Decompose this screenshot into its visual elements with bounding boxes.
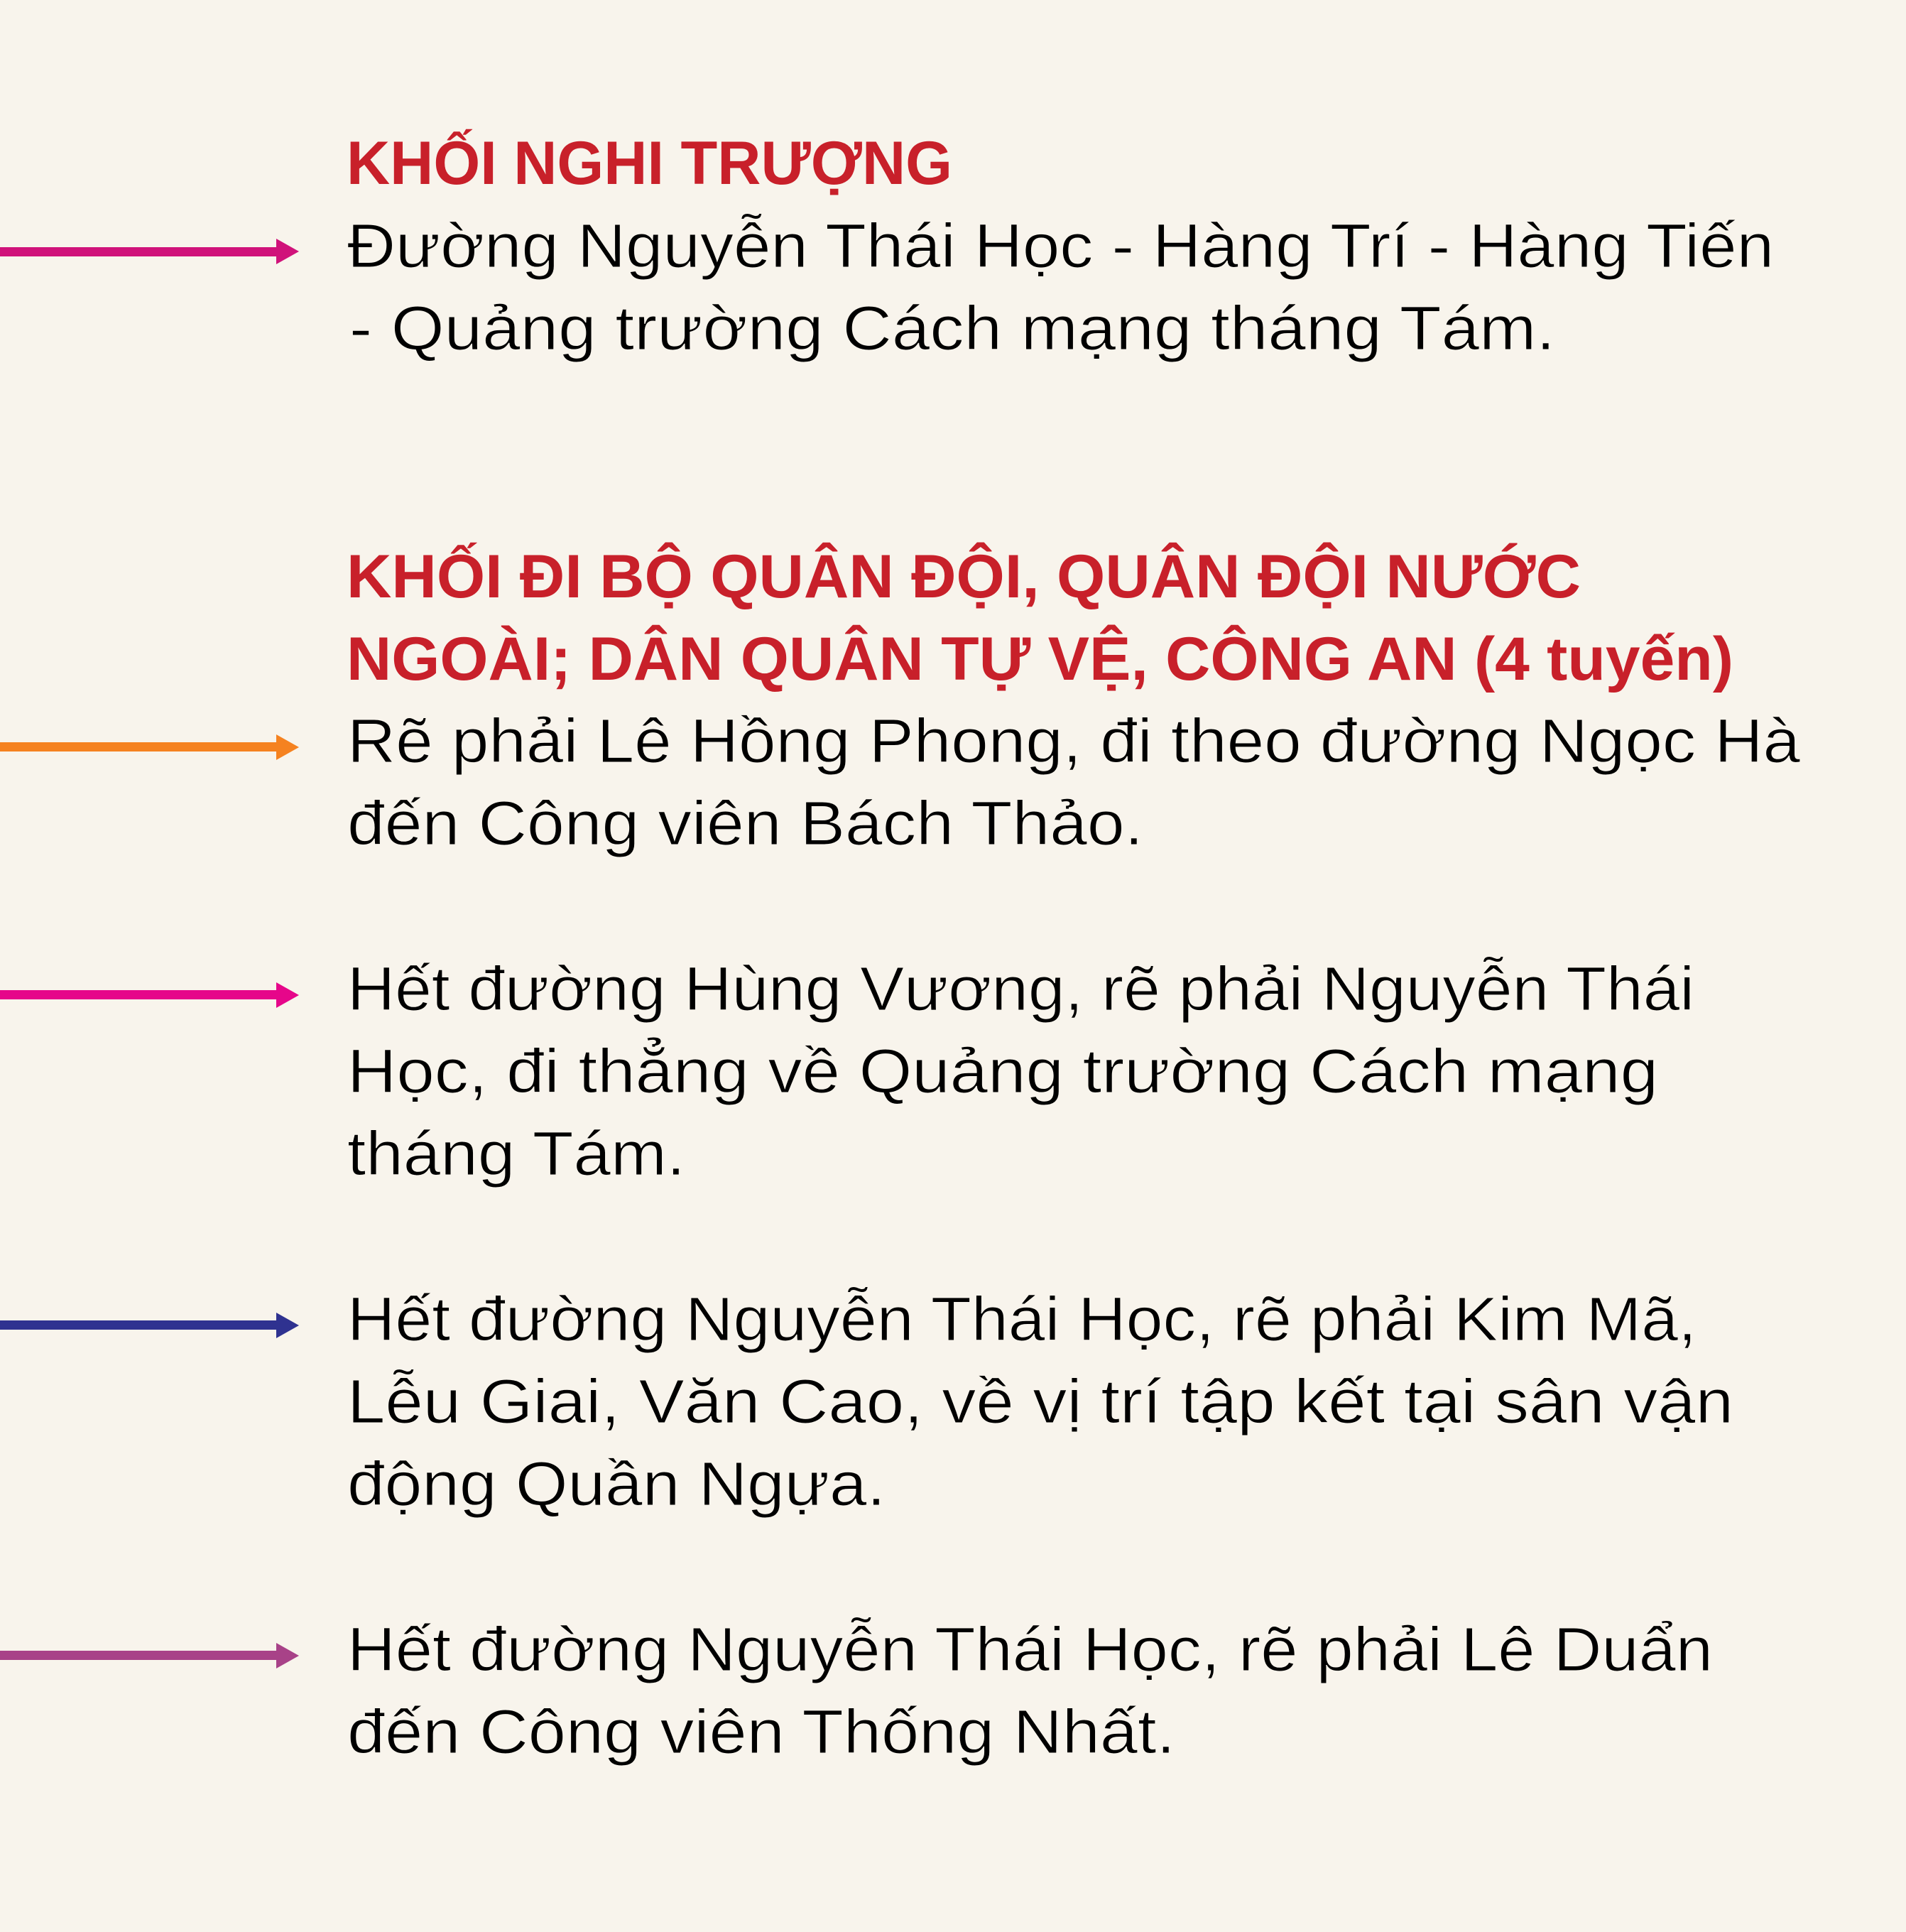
arrow: purple route: [0, 1643, 299, 1668]
route description: navy, line 3: động Quần Ngựa.: [347, 1450, 886, 1519]
route description: orange, line 1: Rẽ phải Lê Hồng Phong, đi theo đường Ngọc Hà: [347, 707, 1801, 776]
route description: magenta, line 3: tháng Tám.: [347, 1119, 685, 1188]
text block: magenta route: [347, 955, 1694, 1188]
arrow: navy route: [0, 1313, 299, 1338]
route description: navy, line 1: Hết đường Nguyễn Thái Học, rẽ phải Kim Mã,: [347, 1285, 1697, 1354]
route description: khoi nghi truong, line 1: Đường Nguyễn Thái Học - Hàng Trí - Hàng Tiến: [347, 212, 1774, 281]
heading: khoi di bo, line 2: NGOÀI; DÂN QUÂN TỰ VỆ, CÔNG AN (4 tuyến): [347, 625, 1733, 693]
text block: khoi di bo: [347, 543, 1801, 858]
route description: purple, line 2: đến Công viên Thống Nhất.: [347, 1698, 1175, 1767]
arrow: khoi nghi truong route: [0, 239, 299, 264]
arrow: magenta route: [0, 982, 299, 1008]
route description: magenta, line 2: Học, đi thẳng về Quảng trường Cách mạng: [347, 1037, 1658, 1106]
text block: purple route: [347, 1615, 1713, 1767]
route description: purple, line 1: Hết đường Nguyễn Thái Học, rẽ phải Lê Duẩn: [347, 1615, 1713, 1684]
text block: navy route: [347, 1285, 1733, 1519]
route description: khoi nghi truong, line 2: - Quảng trường Cách mạng tháng Tám.: [349, 294, 1555, 363]
route description: orange, line 2: đến Công viên Bách Thảo.: [347, 789, 1143, 858]
heading: khoi di bo, line 1: KHỐI ĐI BỘ QUÂN ĐỘI, QUÂN ĐỘI NƯỚC: [347, 543, 1581, 611]
heading: khoi nghi truong: KHỐI NGHI TRƯỢNG: [347, 129, 952, 197]
route description: magenta, line 1: Hết đường Hùng Vương, rẽ phải Nguyễn Thái: [347, 955, 1694, 1024]
text block: khoi nghi truong: [347, 129, 1774, 363]
route description: navy, line 2: Lễu Giai, Văn Cao, về vị trí tập kết tại sân vận: [347, 1367, 1733, 1436]
arrow: orange route: [0, 734, 299, 760]
